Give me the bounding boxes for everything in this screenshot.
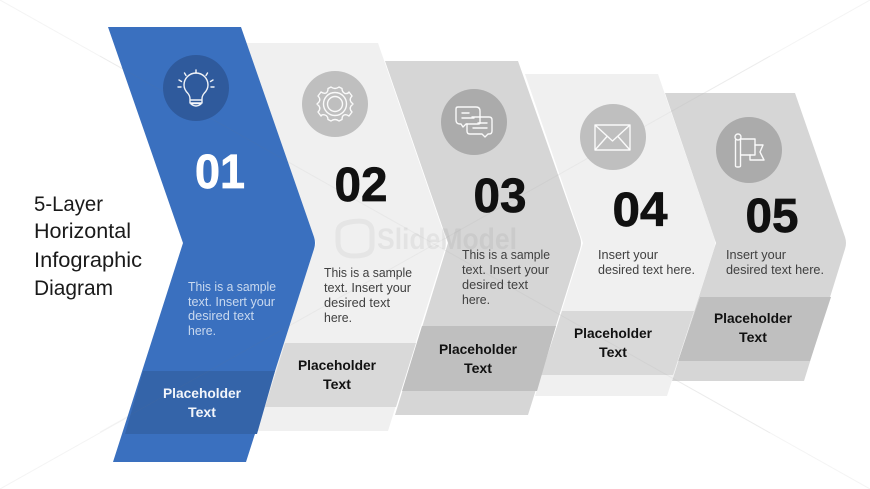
layer 02 chevron panel [245,43,446,431]
text block 01: text. Insert your [188,294,276,309]
text block 04: Insert your [598,247,659,262]
placeholder label 01: Placeholder [163,385,242,401]
placeholder label 02 [298,357,377,392]
text block 03 [462,247,550,307]
text block 05: Insert your [726,247,787,262]
layer 04 band [541,311,694,375]
placeholder label 04: Placeholder [574,325,653,341]
placeholder label 02: Text [323,376,351,392]
text block 01: This is a sample [188,279,276,294]
icon: chat bubbles [441,89,507,155]
icon: light bulb [163,55,229,121]
number 01: 01 [195,146,245,199]
text block 05: desired text here. [726,262,824,277]
title: Diagram [34,277,113,300]
text block 02: desired text [324,295,390,310]
placeholder label 02: Placeholder [298,357,377,373]
text block 02: here. [324,310,352,325]
text block 03: here. [462,292,490,307]
watermark: SlideModel [377,223,517,256]
number 02: 02 [334,159,388,212]
placeholder label 01 [163,385,242,420]
text block 02 [324,265,412,325]
placeholder label 04 [574,325,653,360]
number 03: 03 [474,170,526,223]
placeholder label 05: Placeholder [714,310,793,326]
layer 04 chevron panel [525,74,715,396]
layer 05 chevron panel [665,93,846,381]
layer 03 chevron panel [385,61,581,415]
icon: envelope [580,104,646,170]
placeholder label 03: Placeholder [439,341,518,357]
text block 03: text. Insert your [462,262,550,277]
placeholder label 05 [714,310,793,345]
text block 01: desired text [188,308,254,323]
title: Infographic [34,249,142,272]
icon: gear [302,71,368,137]
text block 03: desired text [462,277,528,292]
watermark [338,221,517,256]
layer 05 band [678,297,831,361]
layer 01 band [125,371,275,434]
faint background lines over panels [100,56,770,433]
title: Horizontal [34,220,131,243]
text block 01 [188,279,276,338]
placeholder label 05: Text [739,329,767,345]
text block 05 [726,247,824,277]
text block 04 [598,247,695,277]
text block 03: This is a sample [462,247,550,262]
placeholder label 01: Text [188,404,216,420]
number 04: 04 [612,184,668,237]
icon: flag [716,117,782,183]
text block 02: text. Insert your [324,280,412,295]
layer 02 band [265,343,416,407]
placeholder label 03: Text [464,360,492,376]
title: 5-Layer [34,193,103,216]
layer 01 chevron panel [108,27,315,462]
text block 01: here. [188,323,216,338]
text block 04: desired text here. [598,262,695,277]
text block 02: This is a sample [324,265,412,280]
number 05: 05 [746,190,798,243]
title [34,193,142,300]
layer 03 band [402,326,556,391]
placeholder label 04: Text [599,344,627,360]
placeholder label 03 [439,341,518,376]
